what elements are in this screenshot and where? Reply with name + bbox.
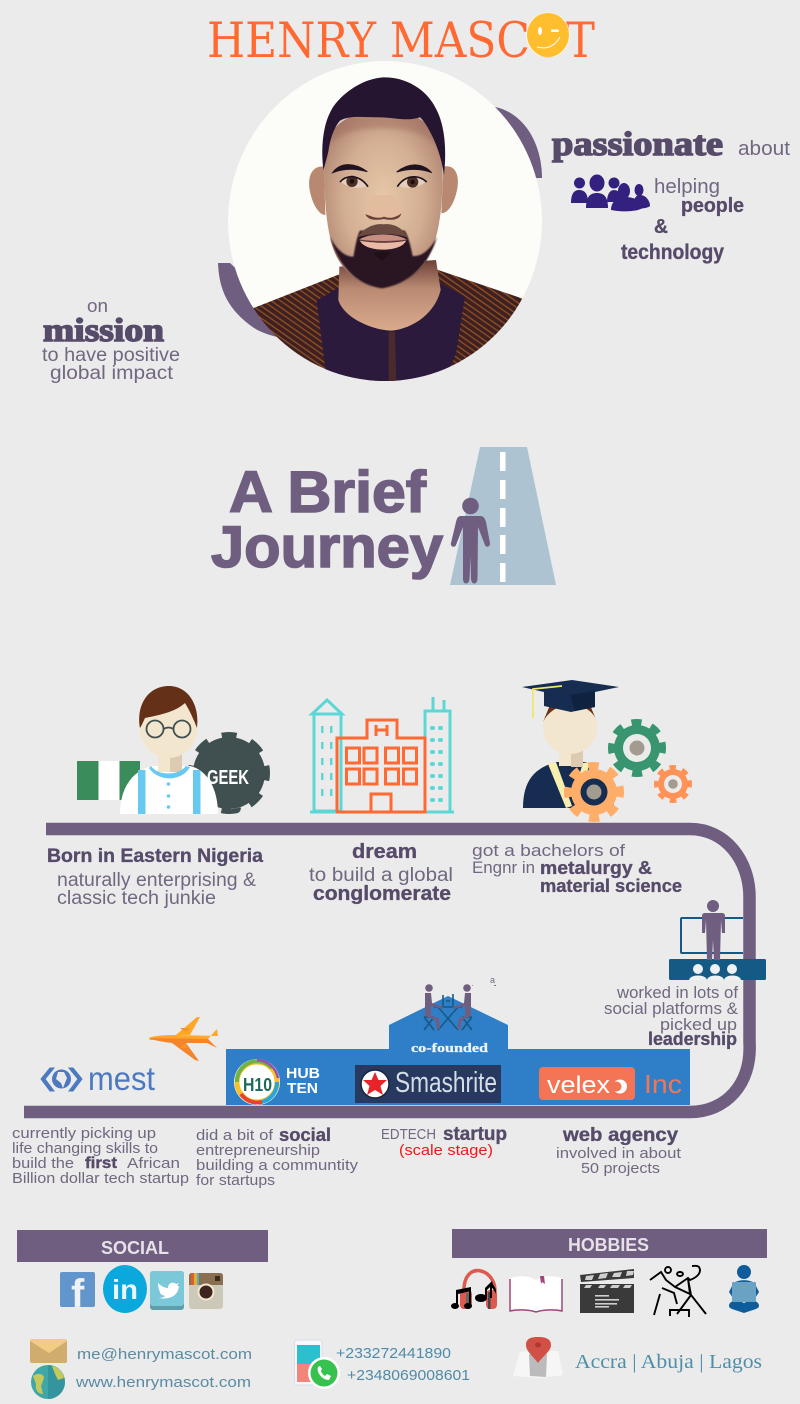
text: born in eastern nigeria: naturally enterprising & <box>57 870 256 891</box>
logo: hub ten: HUB <box>286 1065 320 1082</box>
logo: mest: mest <box>88 1060 155 1097</box>
icon: orange gear <box>565 763 623 821</box>
text: mest description <box>12 1125 189 1187</box>
portrait photo <box>228 61 542 393</box>
timeline path <box>24 829 750 1112</box>
icon: green gear <box>608 719 666 777</box>
icon: presenter on stage <box>669 900 766 980</box>
icon: phone <box>294 1340 322 1385</box>
forehead shading <box>331 117 434 142</box>
panel: passionate about: about <box>738 138 790 160</box>
icon: buildings <box>310 697 454 812</box>
panel: mission: mission <box>43 313 164 349</box>
text: mest description: first <box>85 1155 118 1172</box>
icon: two people at a table <box>424 984 472 1030</box>
shirt <box>253 270 522 381</box>
panel: co-founded house <box>389 996 508 1055</box>
panel: mission: on <box>87 296 108 316</box>
icon: geek gear <box>187 731 271 815</box>
text: leadership: social platforms & <box>604 999 739 1018</box>
text: social entrepreneurship: entrepreneurship <box>196 1142 320 1159</box>
panel: co-founded house: co-founded <box>411 1040 489 1055</box>
panel: passionate about: passionate <box>552 126 723 163</box>
logo: velexo inc <box>539 1067 682 1100</box>
icon: open book <box>510 1276 562 1312</box>
decorative arc top right <box>480 107 542 178</box>
text: email: me@henrymascot.com <box>77 1346 252 1363</box>
moustache <box>357 224 408 238</box>
panel: passionate about: people <box>681 195 744 217</box>
eye left <box>340 176 368 188</box>
icon: graduate <box>522 680 619 808</box>
heading: social <box>17 1230 268 1262</box>
text: dream: dream <box>352 841 417 863</box>
decorative arc bottom left <box>218 263 290 337</box>
icon: linkedin <box>103 1265 147 1313</box>
text: mest description: Billion dollar tech startup <box>12 1170 189 1187</box>
heading: hobbies <box>452 1229 767 1258</box>
ears <box>309 166 325 215</box>
text: born in eastern nigeria: Born in Eastern Nigeria <box>47 846 263 867</box>
text: web agency: web agency <box>562 1125 678 1146</box>
icon: small orange gear <box>654 765 692 803</box>
eye right <box>397 176 427 188</box>
shirt dark front <box>316 284 465 381</box>
beard <box>330 231 437 288</box>
title: HENRY MASCOT <box>207 12 595 69</box>
text: web agency: 50 projects <box>581 1160 660 1177</box>
text: bachelors: Engnr in <box>472 858 535 877</box>
logo: hub ten: H10 <box>243 1075 272 1095</box>
mortar board <box>522 680 619 712</box>
text: phone numbers: +2348069008601 <box>347 1367 470 1384</box>
logo: velexo inc: Inc <box>644 1069 682 1099</box>
panel: passionate about: helping <box>654 176 720 198</box>
logo: mest <box>41 1060 155 1097</box>
text: dream <box>309 841 453 905</box>
logo: velexo inc: velex <box>547 1072 610 1099</box>
text: leadership <box>604 983 739 1049</box>
face <box>324 110 443 287</box>
icon: facebook: f <box>71 1272 85 1316</box>
text: bachelors: got a bachelors of <box>472 841 625 860</box>
heading: a brief journey: Journey <box>211 515 443 580</box>
chin patch <box>373 251 391 261</box>
icon: music <box>451 1271 497 1309</box>
text: mest description: life changing skills to <box>12 1140 158 1157</box>
icon: whatsapp <box>308 1357 340 1389</box>
heading: hobbies: HOBBIES <box>568 1235 649 1255</box>
panel: blue ventures band <box>226 1049 690 1105</box>
tassel <box>533 686 562 718</box>
heading: a brief journey <box>211 460 443 580</box>
panel: mission: to have positive <box>42 345 180 366</box>
logo: smashrite: Smashrite <box>395 1067 497 1099</box>
text: mest description: African <box>127 1155 180 1172</box>
icon: envelope <box>30 1339 67 1363</box>
eyebrows <box>333 165 367 173</box>
logo: hub ten: TEN <box>287 1080 318 1097</box>
text: web agency <box>556 1125 682 1177</box>
hair <box>322 77 445 175</box>
icon: person with laptop <box>729 1265 759 1313</box>
icon: nigerian flag <box>77 761 140 800</box>
neck <box>338 260 441 331</box>
logo: hub ten <box>234 1059 320 1105</box>
text: bachelors: material science <box>540 876 682 896</box>
icon: map pin <box>513 1337 563 1378</box>
text: bachelors <box>472 841 682 896</box>
text: social entrepreneurship: for startups <box>196 1172 275 1189</box>
icon: person walking on road <box>451 498 490 584</box>
text: leadership: leadership <box>648 1029 737 1049</box>
text: web agency: involved in about <box>556 1145 682 1162</box>
text: mest description: currently picking up <box>12 1125 156 1142</box>
text: social entrepreneurship: building a communtity <box>196 1157 359 1174</box>
icon: geek person <box>120 686 218 814</box>
icon: winking smiley <box>526 12 570 58</box>
text: edtech startup <box>381 1124 507 1159</box>
text: edtech startup: (scale stage) <box>399 1142 493 1159</box>
icon: clapperboard <box>580 1269 634 1313</box>
panel: passionate about: & <box>654 216 668 238</box>
text: social entrepreneurship: did a bit of <box>196 1127 274 1144</box>
text: social entrepreneurship <box>196 1125 359 1189</box>
text: mest description: build the <box>12 1155 74 1172</box>
lips <box>359 234 407 242</box>
placket <box>388 332 396 381</box>
icon: twitter <box>150 1271 184 1310</box>
text: dream: to build a global <box>309 865 453 886</box>
text: edtech startup: EDTECH <box>381 1126 436 1143</box>
panel: mission: global impact <box>50 363 174 384</box>
text: phone numbers <box>336 1345 470 1384</box>
icon: geek gear: GEEK <box>207 767 249 789</box>
heading: social: SOCIAL <box>101 1238 169 1258</box>
text: born in eastern nigeria: classic tech junkie <box>57 888 216 909</box>
left tower <box>310 700 345 812</box>
text: dream: conglomerate <box>313 883 451 905</box>
orange hotel <box>336 720 425 812</box>
text: social entrepreneurship: social <box>279 1125 331 1145</box>
panel: mission <box>42 296 180 384</box>
text: edtech startup: startup <box>443 1124 507 1145</box>
stray letter <box>472 975 496 986</box>
nose <box>376 195 390 208</box>
text: cities: Accra | Abuja | Lagos <box>575 1351 762 1373</box>
text: website: www.henrymascot.com <box>75 1374 251 1391</box>
right tower <box>425 697 454 812</box>
stray letter: a <box>490 975 495 985</box>
text: leadership: picked up <box>660 1015 737 1034</box>
heading: a brief journey: A Brief <box>229 460 427 525</box>
panel: passionate about: technology <box>621 241 724 264</box>
icon: group of people <box>571 174 650 211</box>
text: bachelors: metalurgy & <box>540 858 652 878</box>
icon: airplane <box>149 1017 218 1061</box>
text: leadership: worked in lots of <box>616 983 738 1002</box>
logo: smashrite <box>355 1065 501 1103</box>
panel: passionate about <box>552 126 790 264</box>
text: phone numbers: +233272441890 <box>336 1345 451 1362</box>
icon: linkedin: in <box>112 1274 138 1305</box>
text: born in eastern nigeria <box>47 846 263 909</box>
icon: road <box>450 447 556 585</box>
icon: globe <box>31 1365 65 1399</box>
icon: facebook <box>60 1272 95 1316</box>
icon: instagram <box>189 1273 223 1309</box>
icon: dancers <box>650 1266 706 1317</box>
